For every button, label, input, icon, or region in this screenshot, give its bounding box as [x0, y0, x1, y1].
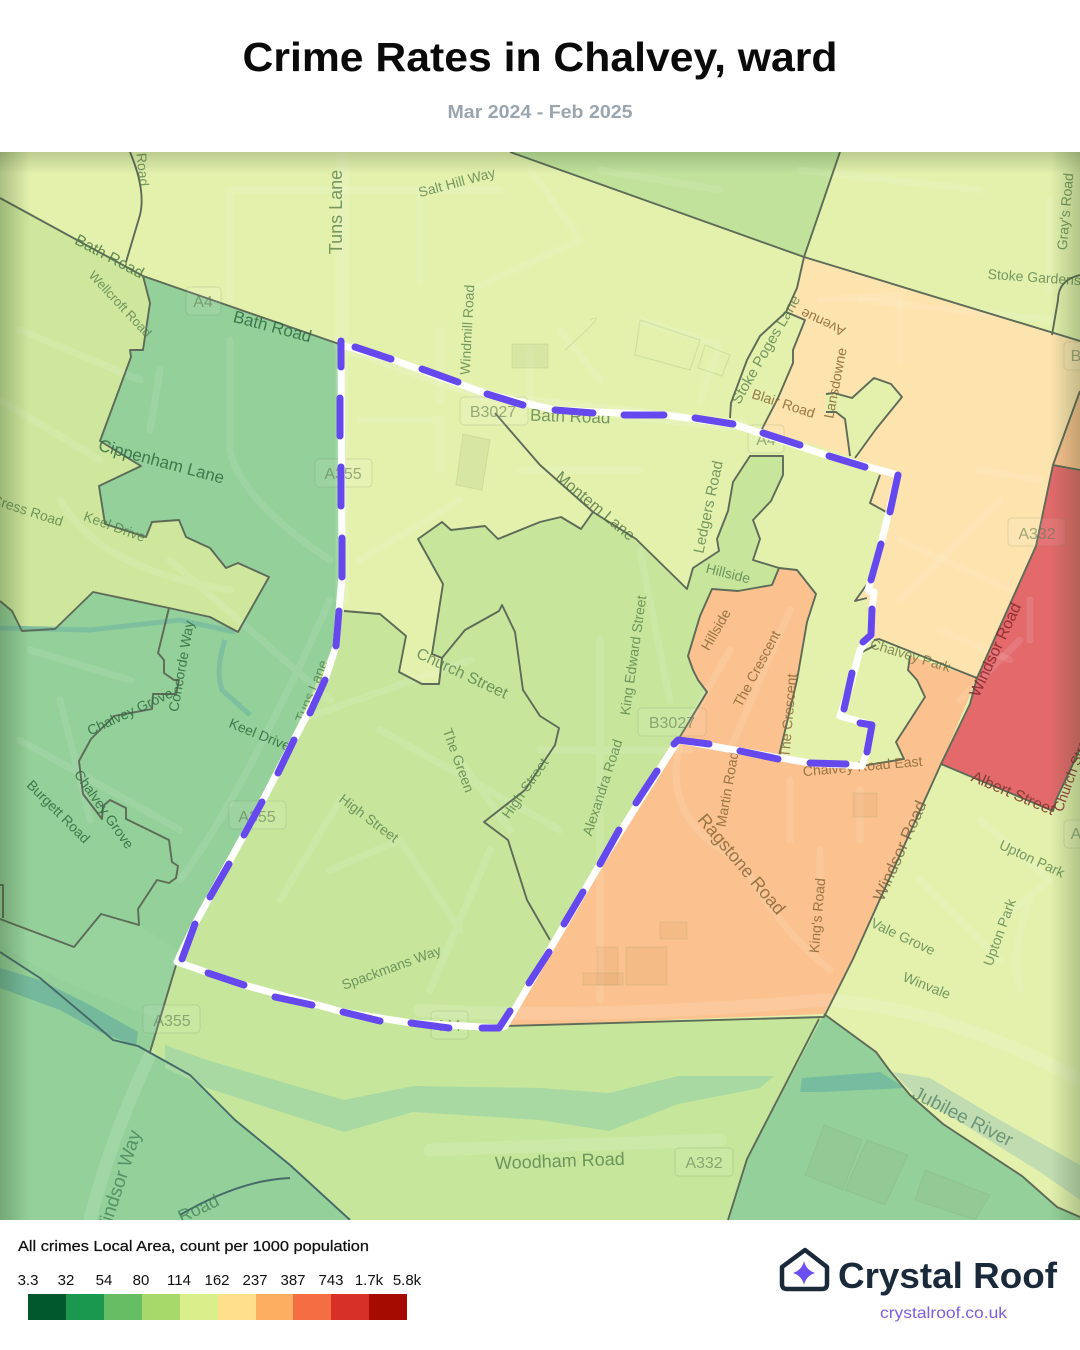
road labels: Windsor Road: [967, 601, 1025, 700]
area: red east: [941, 465, 1080, 811]
road number badges: A4: [193, 294, 213, 311]
road labels: Avenue: [798, 305, 848, 340]
buildings: [456, 344, 990, 1220]
road labels: King Edward Street: [617, 594, 649, 716]
road labels: Jubilee River: [909, 1083, 1017, 1152]
area: west light green: [0, 198, 269, 632]
legend values: 387: [280, 1272, 306, 1289]
road number badges: B3027: [470, 404, 516, 421]
legend values: 114: [167, 1272, 191, 1289]
icon: house with star: [782, 1250, 827, 1289]
road labels: Keel Drive: [227, 715, 293, 754]
road labels: Windmill Road: [457, 284, 477, 375]
area: orange Ragstone Road: [505, 568, 977, 1026]
road number badges: A355: [324, 466, 362, 483]
legend colour scale: [28, 1294, 407, 1320]
road labels: Road: [175, 1190, 222, 1227]
road labels: High Street: [336, 791, 402, 846]
area: lower-left pale strip: [0, 885, 177, 1020]
road labels: Upton Park: [980, 896, 1019, 968]
legend values: 743: [318, 1272, 344, 1289]
legend values: 80: [133, 1272, 149, 1289]
road labels: Winvale: [901, 969, 953, 1002]
legend values: 54: [96, 1272, 112, 1289]
road labels: Chalvey Road East: [802, 753, 923, 779]
road number badges: A355: [153, 1013, 191, 1030]
road labels: Gray's Road: [1054, 172, 1076, 251]
road labels: Ragstone Road: [694, 810, 789, 918]
road labels: Martin Road: [713, 750, 742, 828]
road labels: Stoke Gardens: [987, 266, 1080, 288]
road number badges: A4: [756, 432, 776, 449]
purple ward dashes: [182, 341, 898, 1028]
road labels: Hillside: [697, 606, 734, 653]
road labels: Windsor Way: [91, 1127, 146, 1241]
road labels: Albert Street: [969, 769, 1058, 819]
map vignette: [0, 152, 1080, 1220]
road labels: Vale Grove: [868, 915, 938, 958]
legend: [18, 1239, 422, 1320]
road labels: Church Street: [414, 645, 511, 703]
legend values: 3.3: [18, 1272, 38, 1289]
area: peach east: [762, 257, 1080, 678]
road labels: Lansdowne: [820, 346, 850, 420]
road labels: Burgett Road: [24, 777, 93, 846]
road labels: Road: [134, 152, 152, 187]
map base area: [0, 152, 1080, 1220]
road labels: Bath Road: [530, 406, 611, 427]
area: south light green: [150, 962, 824, 1220]
road labels: Ledgers Road: [690, 459, 727, 555]
road labels: The Green: [440, 726, 478, 794]
legend title: All crimes Local Area, count per 1000 population: [18, 1239, 369, 1255]
title: Crime Rates in Chalvey, ward: [242, 34, 838, 80]
road labels: The Crescent: [730, 628, 783, 710]
road labels: Alexandra Road: [579, 737, 625, 838]
road labels: Keel Drive: [82, 508, 148, 545]
road labels: Blair Road: [750, 386, 817, 421]
road labels: Chalvey Grove: [85, 685, 175, 738]
road network: [0, 152, 1080, 1220]
website url: crystalroof.co.uk: [880, 1305, 1008, 1322]
road labels: Windsor Road: [869, 798, 931, 904]
road labels: Bath Road: [72, 232, 146, 282]
legend values: 32: [58, 1272, 74, 1289]
road labels: Concorde Way: [165, 619, 197, 713]
road number badges: M4: [439, 1018, 461, 1035]
road labels: Tuns Lane: [326, 170, 346, 254]
area: north green: [510, 152, 840, 257]
legend values: 237: [242, 1272, 268, 1289]
legend values: [18, 1272, 422, 1289]
white ward outline: [177, 345, 898, 1028]
boundary lines: [0, 152, 1080, 1220]
road labels: Spackmans Way: [339, 942, 443, 993]
road labels: The Crescent: [776, 673, 800, 758]
road labels: Hillside: [704, 560, 752, 586]
road labels: King's Road: [806, 877, 828, 954]
road labels: Montem Lane: [552, 469, 638, 545]
road labels: Cippenham Lane: [96, 436, 226, 488]
road labels: High Street: [498, 755, 552, 821]
area: west green: [0, 198, 350, 1220]
road labels: Chalvey Park: [868, 635, 954, 675]
legend values: 162: [204, 1272, 230, 1289]
legend values: 1.7k: [355, 1272, 384, 1289]
road number badges: A355: [238, 809, 276, 826]
road number badges: [143, 287, 1080, 1176]
road labels: Tuns Lane: [292, 658, 331, 725]
road labels: Wellcroft Road: [86, 268, 155, 340]
legend values: 5.8k: [393, 1272, 422, 1289]
area: south-east green: [728, 1014, 1080, 1220]
ward boundary: Chalvey: [177, 341, 898, 1028]
river bands: [0, 620, 1080, 1200]
road labels: Chalvey Grove: [71, 767, 137, 852]
subtitle: date range: Mar 2024 - Feb 2025: [448, 101, 632, 122]
road labels: Woodham Road: [495, 1149, 625, 1173]
road labels: Stoke Poges Lane: [728, 292, 804, 407]
logo: Crystal Roof: [782, 1250, 1058, 1322]
road number badges: B3027: [649, 715, 695, 732]
road labels: Upton Park: [997, 836, 1068, 881]
area: ward green: [177, 456, 783, 1026]
logo wordmark: Crystal Roof: [838, 1255, 1058, 1296]
road labels: Salt Hill Way: [417, 164, 497, 200]
area: orange east sliver: [1053, 391, 1080, 470]
road number badges: A332: [685, 1155, 723, 1172]
road number badges: A332: [1018, 526, 1056, 543]
road labels: Bath Road: [231, 307, 314, 346]
